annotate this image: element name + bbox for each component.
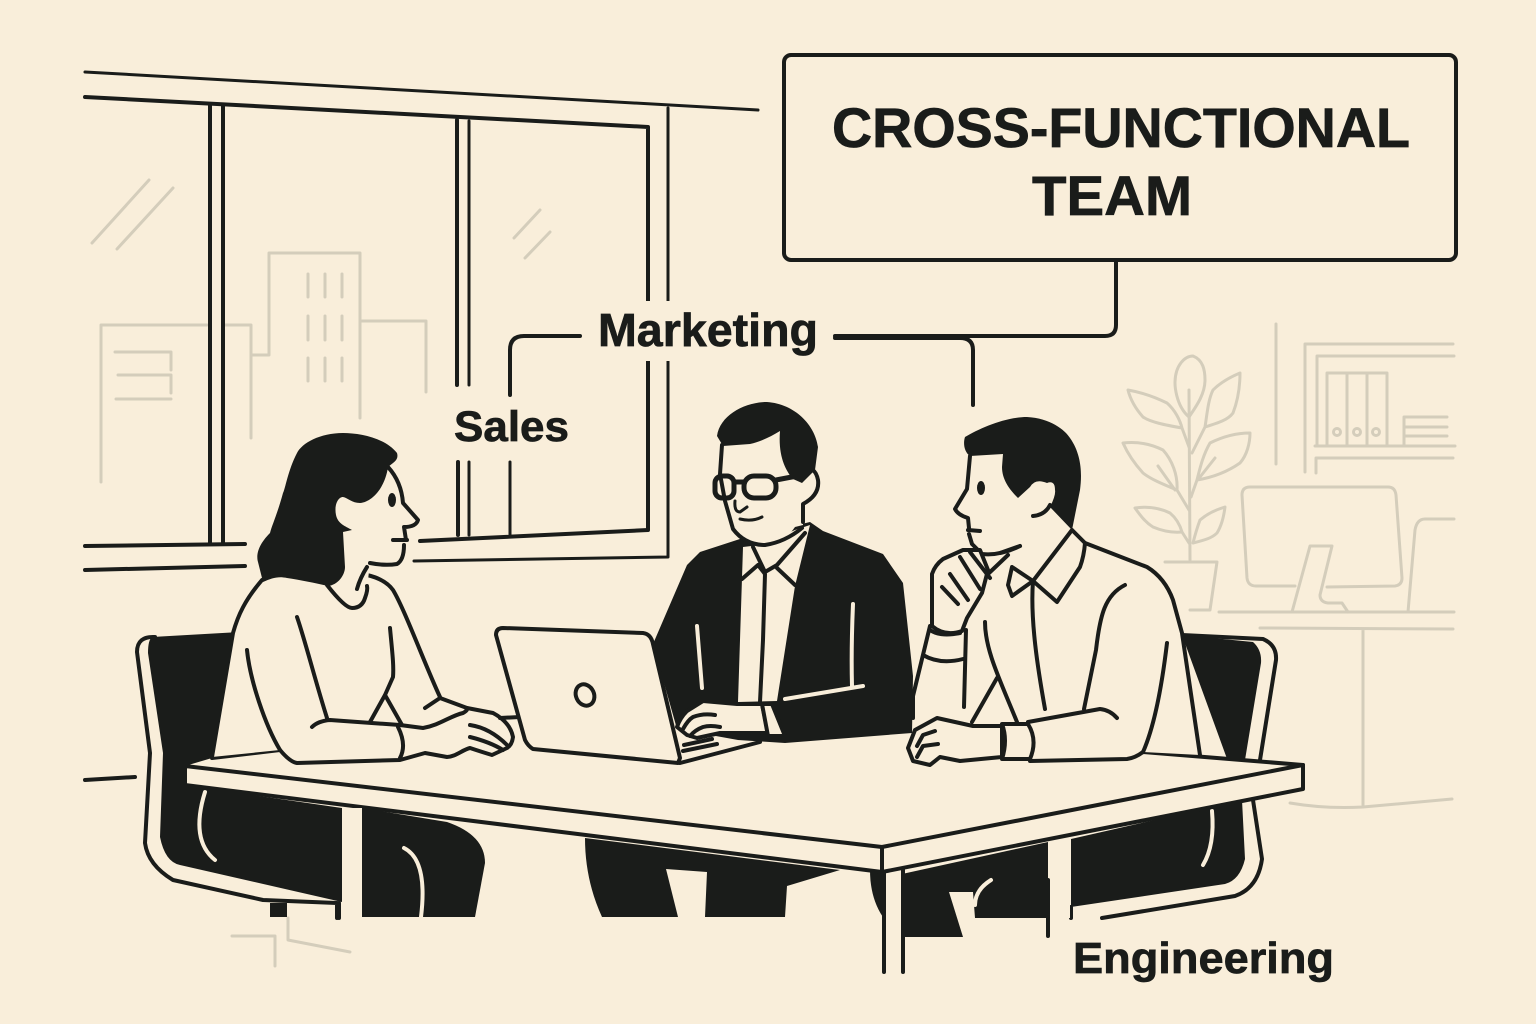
title box: CROSS-FUNCTIONAL	[832, 96, 1410, 159]
woman neckline	[327, 567, 367, 608]
window frame	[85, 72, 758, 780]
man shirt	[738, 525, 810, 702]
engineer collar	[1008, 530, 1085, 602]
title box	[784, 55, 1456, 260]
label: Engineering: Engineering	[1073, 934, 1334, 983]
background: monitor and desk	[1219, 487, 1454, 808]
engineer raised arm	[913, 626, 966, 718]
man suit highlights	[697, 604, 863, 699]
person: Marketing man	[653, 402, 913, 743]
man glasses	[715, 476, 797, 498]
label connector lines	[510, 260, 1116, 405]
woman sweater creases	[247, 617, 402, 750]
man face	[720, 435, 818, 545]
woman forearm and hand	[280, 708, 513, 763]
label: Marketing: Marketing	[598, 304, 818, 356]
woman hair	[257, 433, 397, 586]
person: Engineering man	[908, 417, 1200, 765]
engineer torso	[913, 530, 1200, 761]
man hair	[717, 402, 818, 483]
person: Sales woman	[212, 433, 520, 763]
engineer hair	[964, 417, 1081, 530]
laptop	[496, 628, 760, 763]
man hand	[677, 701, 768, 738]
engineer raised hand	[932, 550, 988, 633]
woman torso	[212, 540, 510, 763]
engineer face	[955, 454, 1072, 554]
engineer lower arm and hand	[1028, 709, 1143, 761]
title box: TEAM	[1032, 164, 1192, 227]
woman face	[345, 467, 418, 590]
engineer shirt creases	[972, 581, 1167, 752]
background: potted plant	[1123, 356, 1250, 610]
background: floor marks	[232, 918, 350, 966]
man jacket	[653, 522, 913, 743]
background: bookshelf with binders	[1276, 324, 1455, 473]
label backing for Marketing	[590, 301, 825, 361]
person legs under table	[362, 808, 1048, 937]
label: Sales: Sales	[454, 403, 569, 451]
chair: right	[1071, 635, 1276, 918]
background: city skyline through window	[92, 180, 550, 482]
chair: left	[137, 632, 342, 918]
table	[185, 750, 1303, 972]
